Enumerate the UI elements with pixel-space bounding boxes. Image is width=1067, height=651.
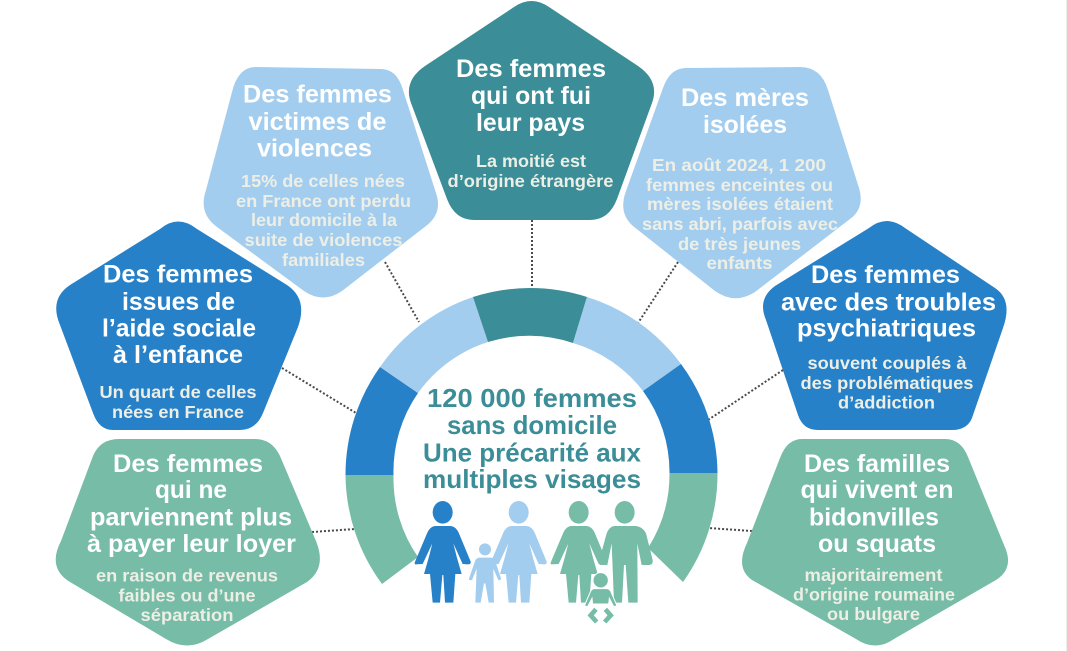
heading: bidonvilles ou squats: qui vivent en [800, 476, 954, 504]
central title [423, 383, 642, 494]
heading: victimes de violences: victimes de [248, 108, 387, 136]
heading: aide sociale à l'enfance: Des femmes [103, 260, 253, 288]
text: août 2024: mères isolées étaient [647, 194, 833, 214]
heading: victimes de violences: violences [257, 134, 372, 162]
heading: payer leur loyer: Des femmes [113, 450, 263, 478]
icon: family figures [415, 501, 653, 622]
icon: blue woman [415, 501, 471, 603]
central title: 120 000 femmes [427, 383, 637, 413]
heading: aide sociale à l'enfance: l’aide sociale [102, 314, 256, 342]
text: souvent couplés à des problématiques d'addiction: d’addiction [838, 392, 935, 412]
text: un quart de celles nées en France [100, 382, 257, 422]
heading: mères isolées: isolées [703, 111, 787, 139]
text: août 2024 [642, 155, 838, 273]
text: majoritairement d'origine roumaine ou bulgare: ou bulgare [827, 604, 920, 624]
panel: aide sociale à l'enfance [56, 222, 301, 430]
dotted connectors [282, 220, 783, 532]
central segmented ring [345, 288, 718, 584]
heading: mères isolées [681, 84, 809, 139]
heading: victimes de violences: Des femmes [243, 80, 392, 108]
text: 15% de celles nées: leur domicile à la [251, 210, 397, 230]
text: la moitié est d'origine étrangère [448, 151, 614, 191]
heading: payer leur loyer: parviennent plus [90, 504, 292, 532]
heading: troubles psychiatriques: avec des troubles [781, 288, 996, 316]
heading: payer leur loyer: à payer leur loyer [87, 530, 296, 558]
text: août 2024: En août 2024, 1 200 [652, 155, 826, 175]
text: 15% de celles nées [236, 171, 411, 270]
panel: troubles psychiatriques [763, 221, 1007, 430]
heading: qui ont fui leur pays: Des femmes [456, 55, 606, 83]
icon: light blue child [469, 543, 501, 603]
text: souvent couplés à des problématiques d'addiction: souvent couplés à [808, 353, 967, 373]
central title: sans domicile [447, 410, 617, 440]
panel: victimes de violences [204, 67, 438, 298]
heading: bidonvilles ou squats: ou squats [818, 530, 936, 558]
heading: troubles psychiatriques: Des femmes [811, 261, 960, 289]
text: en raison de revenus faibles [96, 566, 278, 625]
heading: aide sociale à l'enfance: à l’enfance [113, 341, 243, 369]
text: en raison de revenus faibles: séparation [140, 605, 234, 625]
central title: Une précarité aux [423, 438, 642, 468]
text: la moitié est d'origine étrangère: d’origine étrangère [448, 171, 614, 191]
icon: light blue woman [491, 501, 547, 603]
heading: qui ont fui leur pays [456, 55, 606, 137]
text: souvent couplés à des problématiques d'addiction [800, 353, 974, 412]
heading: troubles psychiatriques: psychiatriques [797, 314, 976, 342]
panel: payer leur loyer [56, 439, 320, 646]
text: août 2024: femmes enceintes ou [646, 175, 833, 195]
heading: payer leur loyer [87, 450, 296, 558]
text: majoritairement d'origine roumaine ou bulgare: majoritairement [804, 565, 943, 585]
text: 15% de celles nées: suite de violences [244, 230, 403, 250]
panel: femmes qui ont fui leur pays [409, 1, 654, 220]
heading: bidonvilles ou squats: bidonvilles [809, 504, 939, 532]
panel: mères isolées [623, 67, 861, 298]
text: majoritairement d'origine roumaine ou bulgare: d’origine roumaine [793, 584, 955, 604]
text: 15% de celles nées: 15% de celles nées [241, 171, 405, 191]
heading: qui ont fui leur pays: leur pays [476, 109, 585, 137]
text: un quart de celles nées en France: Un quart de celles [100, 382, 257, 402]
text: août 2024: enfants [706, 253, 773, 273]
text: 15% de celles nées: familiales [282, 250, 365, 270]
icon: green couple and baby [551, 501, 653, 622]
heading: aide sociale à l'enfance: issues de [122, 288, 235, 316]
text: majoritairement d'origine roumaine ou bulgare [793, 565, 955, 624]
text: août 2024: de très jeunes [678, 234, 801, 254]
panel: bidonvilles ou squats [742, 439, 1008, 646]
heading: payer leur loyer: qui ne [155, 476, 227, 504]
text: souvent couplés à des problématiques d'addiction: des problématiques [800, 373, 974, 393]
heading: mères isolées: Des mères [681, 84, 809, 112]
central title: multiples visages [423, 464, 641, 494]
heading: aide sociale à l'enfance [102, 260, 256, 369]
heading: victimes de violences [243, 80, 392, 162]
text: la moitié est d'origine étrangère: La moitié est [476, 151, 586, 171]
heading: bidonvilles ou squats: Des familles [804, 450, 950, 478]
text: août 2024: sans abri, parfois avec [642, 214, 838, 234]
text: 15% de celles nées: en France ont perdu [236, 191, 411, 211]
text: en raison de revenus faibles: en raison de revenus [96, 566, 278, 586]
text: un quart de celles nées en France: nées en France [112, 402, 244, 422]
heading: qui ont fui leur pays: qui ont fui [471, 82, 591, 110]
text: en raison de revenus faibles: faibles ou d’une [118, 586, 256, 606]
heading: troubles psychiatriques [781, 261, 996, 342]
heading: bidonvilles ou squats [800, 450, 954, 558]
